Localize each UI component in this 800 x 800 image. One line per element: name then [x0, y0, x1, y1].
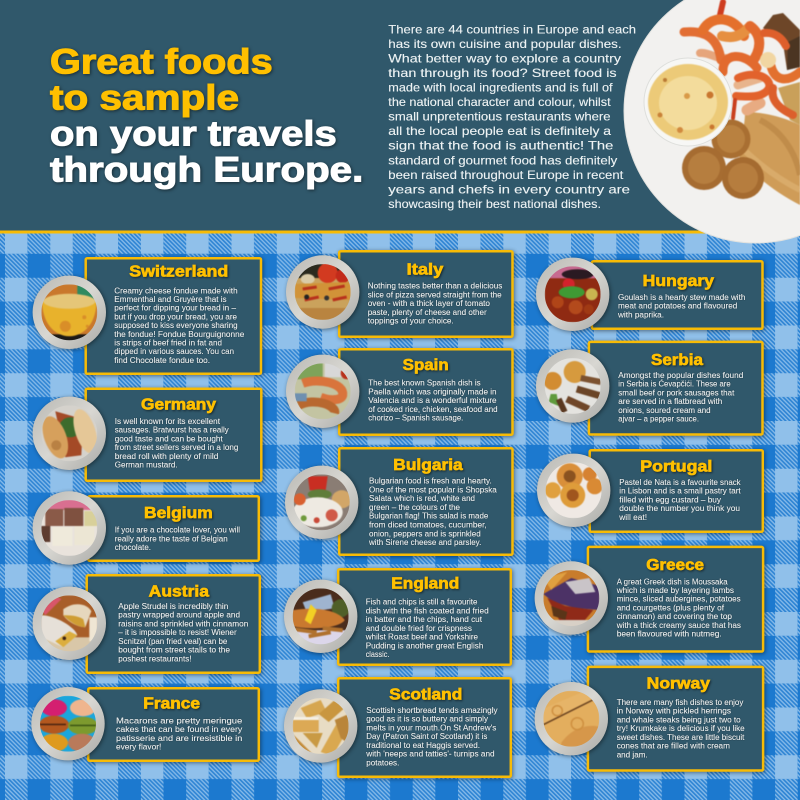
text block: England: classic.: [366, 649, 389, 659]
panel: Serbia: [536, 342, 762, 434]
icon: Belgian chocolates: [33, 491, 106, 565]
text block: Austria: pastry wrapped around apple and: [118, 610, 240, 620]
heading: Belgium: Belgium: [144, 505, 213, 522]
text block: Switzerland: but if you drop your bread, you are: [114, 311, 237, 321]
text block: Serbia: [618, 370, 743, 424]
panel: Greece: [535, 547, 763, 652]
panel: Germany: [33, 389, 261, 481]
heading: Hungary: Hungary: [643, 273, 714, 290]
text block: England: and double fried for crispness: [366, 623, 472, 633]
text block: Serbia: Amongst the popular dishes found: [618, 370, 743, 380]
text block: Bulgaria: with Sirene cheese and parsley.: [368, 537, 481, 547]
text block: Hungary: meat and potatoes and flavoured: [618, 301, 738, 311]
icon: macarons: [31, 687, 105, 760]
text block: Norway: and whale steaks being just two to: [617, 714, 741, 724]
text block: England: dish with the fish coated and fried: [366, 605, 489, 615]
text block: Switzerland: [114, 285, 245, 365]
text block: Portugal: filled with egg custard – buy: [619, 494, 722, 504]
icon: krumkake: [535, 682, 608, 755]
text block: Italy: paste, plenty of cheese and other: [368, 307, 487, 317]
title: through Europe.: [50, 150, 363, 190]
intro paragraph: sign that the food is authentic! The: [388, 139, 614, 153]
text block: Italy: slice of pizza served straight from the: [368, 289, 502, 299]
text block: Serbia: onions, soured cream and: [618, 405, 711, 415]
intro paragraph: standard of gourmet food has definitely: [388, 153, 617, 167]
panel: Italy: [286, 251, 512, 337]
text block: Portugal: [618, 477, 741, 522]
text block: Italy: oven - with a thick layer of tomato: [368, 298, 490, 308]
text block: Greece: A great Greek dish is Moussaka: [617, 576, 728, 586]
intro paragraph: has its own cuisine and popular dishes.: [388, 37, 622, 51]
text block: Norway: in Norway with pickled herrings: [617, 706, 731, 716]
text block: Greece: cinnamon) and covering the top: [617, 611, 732, 621]
panel: France: [31, 687, 259, 761]
icon: plate of seafood: [624, 0, 800, 243]
intro paragraph: made with local ingredients and is full of: [388, 80, 613, 94]
text block: Austria: Scnitzel (pan fried veal) can be: [118, 636, 227, 646]
text block: Italy: toppings of your choice.: [368, 316, 454, 326]
text block: Spain: Valencia and is a wonderful mixture: [368, 395, 497, 405]
text block: Greece: mince, sliced aubergines, potatoes: [617, 594, 741, 604]
header band: [0, 0, 800, 234]
heading: Bulgaria: Bulgaria: [393, 457, 463, 474]
title: Great foods: [50, 41, 273, 81]
text block: Switzerland: perfect for dipping your bread in –: [114, 303, 236, 313]
text block: Scotland: good as it is so buttery and simply: [366, 714, 489, 724]
text block: Greece: [616, 576, 741, 639]
heading: Austria: Austria: [149, 584, 209, 601]
icon: cevapcici: [536, 349, 609, 423]
text block: Germany: German mustard.: [115, 460, 178, 470]
text block: England: Fish and chips is still a favourite: [366, 597, 478, 607]
text block: Austria: – it is impossible to resist! Wiener: [118, 627, 237, 637]
intro paragraph: showcasing their best national dishes.: [388, 197, 601, 211]
heading: Germany: Germany: [141, 396, 216, 414]
text block: Switzerland: Emmenthal and Gruyère that is: [114, 294, 227, 304]
text block: France: every flavor!: [116, 742, 161, 752]
text block: Greece: which is made by layering lambs: [616, 585, 734, 595]
intro paragraph: [388, 22, 636, 211]
text block: Switzerland: supposed to kiss everyone sharing: [114, 320, 238, 330]
heading: Scotland: Scotland: [389, 686, 462, 703]
text block: Germany: bread roll with plenty of mild: [115, 451, 219, 461]
text block: Switzerland: find Chocolate fondue too.: [114, 355, 210, 365]
text block: Bulgaria: [368, 476, 497, 547]
panel: Austria: [33, 575, 260, 673]
panel: Portugal: [537, 450, 763, 532]
text block: Norway: cones that are filled with cream: [617, 741, 730, 751]
text block: Scotland: Scottish shortbread tends amazingly: [366, 705, 498, 715]
heading: France: France: [143, 695, 200, 712]
intro paragraph: There are 44 countries in Europe and each: [388, 22, 636, 36]
text block: Hungary: [617, 292, 746, 319]
text block: Serbia: ajvar – a pepper sauce.: [618, 414, 699, 424]
text block: Bulgaria: onion, peppers and is sprinkled: [369, 528, 481, 538]
text block: England: in batter and the chips, hand cut: [366, 614, 483, 624]
text block: Scotland: melts in your mouth.On St Andrew's: [366, 722, 496, 732]
text block: Norway: try! Krumkake is delicious if you like: [617, 723, 745, 733]
text block: Austria: bought from street stalls to the: [118, 645, 230, 655]
text block: Switzerland: dipped in various sauces. You can: [114, 346, 234, 356]
panel: Hungary: [536, 258, 762, 331]
icon: pizza: [286, 255, 359, 329]
text block: Bulgaria: One of the most popular is Shopska: [369, 484, 497, 494]
text block: Greece: with a thick creamy sauce that has: [616, 620, 741, 630]
text block: Italy: Nothing tastes better than a delicious: [368, 281, 502, 291]
text block: Germany: Is well known for its excellent: [115, 416, 221, 426]
panel: Norway: [535, 667, 763, 770]
text block: Belgium: chocolate.: [115, 542, 151, 552]
text block: Norway: There are many fish dishes to enjoy: [617, 697, 744, 707]
icon: goulash: [536, 258, 609, 331]
text block: Serbia: small beef or pork sausages that: [618, 387, 735, 397]
text block: France: Macarons are pretty meringue: [116, 715, 243, 725]
text block: Serbia: are served in a flatbread with: [618, 396, 722, 406]
intro paragraph: been raised throughout Europe in recent: [388, 168, 624, 182]
icon: fish and chips: [284, 580, 357, 653]
heading: Switzerland: Switzerland: [129, 264, 228, 281]
icon: paella: [286, 355, 359, 428]
panel: Bulgaria: [285, 448, 512, 555]
text block: Serbia: in Serbia is Ćevapčići. These are: [618, 379, 731, 389]
text block: France: patisserie and are irresistible in: [116, 733, 243, 743]
panel: Belgium: [33, 491, 259, 565]
text block: England: whilst Roast beef and Yorkshire: [365, 632, 478, 642]
text block: Norway: [617, 697, 745, 759]
text block: Belgium: really adore the taste of Belgian: [115, 533, 228, 543]
text block: Portugal: double the number you think you: [619, 503, 740, 513]
text block: Bulgaria: Salata which is red, white and: [369, 493, 475, 503]
text block: Norway: sweet dishes. These are little biscuit: [617, 732, 745, 742]
heading: Greece: Greece: [646, 557, 704, 574]
icon: shortbread: [284, 689, 357, 763]
icon: bratwurst roll: [33, 397, 106, 470]
intro paragraph: the national character and colour, whilst: [388, 95, 611, 109]
text block: Belgium: [115, 525, 240, 552]
panel: England: [284, 569, 511, 665]
text block: Scotland: traditional to eat Haggis served.: [366, 740, 480, 750]
intro paragraph: all the local people eat is definitely a: [388, 124, 611, 138]
text block: Spain: Paella which was originally made in: [368, 386, 497, 396]
intro paragraph: small unpretentious restaurants where: [388, 110, 611, 124]
heading: Portugal: Portugal: [640, 459, 712, 476]
icon: shopska salad: [285, 466, 358, 539]
panel: Switzerland: [33, 258, 261, 374]
text block: Germany: [115, 416, 239, 470]
text block: Hungary: Goulash is a hearty stew made with: [618, 292, 746, 302]
text block: Switzerland: the fondue! Fondue Bourguignonne: [114, 329, 245, 339]
text block: Switzerland: is strips of beef fried in fat and: [114, 338, 222, 348]
icon: apple strudel: [33, 587, 106, 660]
heading: England: England: [391, 575, 459, 592]
text block: Spain: The best known Spanish dish is: [368, 378, 481, 388]
text block: Portugal: will eat!: [618, 512, 647, 522]
text block: Belgium: If you are a chocolate lover, you will: [115, 525, 240, 535]
panel: Scotland: [284, 678, 511, 777]
text block: Bulgaria: Bulgarian flag! This salad is made: [369, 511, 488, 521]
text block: Austria: poshest restaurants!: [118, 653, 192, 663]
title: to sample: [50, 78, 239, 118]
text block: France: cakes that can be found in every: [116, 724, 243, 734]
text block: Portugal: Pastel de Nata is a favourite snack: [619, 477, 741, 487]
text block: Switzerland: Creamy cheese fondue made with: [114, 285, 238, 295]
text block: Bulgaria: Bulgarian food is fresh and hearty.: [369, 476, 492, 486]
text block: Germany: from street sellers served in a long: [115, 442, 239, 452]
text block: Spain: chorizo – Spanish sausage.: [368, 413, 463, 423]
icon: pastel de nata: [537, 454, 610, 527]
text block: Bulgaria: from diced tomatoes, cucumber,: [369, 520, 487, 530]
gingham tablecloth background: [0, 230, 800, 800]
icon: moussaka: [535, 561, 608, 635]
intro paragraph: years and chefs in every country are: [388, 182, 630, 196]
text block: Italy: [368, 281, 502, 326]
text block: Bulgaria: green – the colours of the: [369, 502, 460, 512]
heading: Spain: Spain: [403, 357, 449, 374]
text block: Greece: and courgettes (plus plenty of: [617, 602, 725, 612]
text block: France: [116, 715, 243, 752]
panel: Spain: [286, 349, 512, 435]
text block: Scotland: Day (Patron Saint of Scotland) it is: [366, 731, 487, 741]
text block: Spain: [368, 378, 498, 423]
text block: Scotland: potatoes.: [366, 757, 399, 767]
text block: Greece: been flavoured with nutmeg.: [617, 629, 722, 639]
heading: Norway: Norway: [647, 675, 710, 692]
text block: Germany: good taste and can be bought: [115, 434, 223, 444]
text block: Scotland: [365, 705, 498, 767]
text block: Spain: of cooked rice, chicken, seafood and: [368, 404, 498, 414]
text block: England: [365, 597, 489, 659]
title: on your travels: [50, 114, 337, 154]
text block: Portugal: in Lisbon and is a small pastry tart: [619, 486, 741, 496]
text block: Scotland: with 'neeps and tatties'- turnips and: [365, 749, 495, 759]
text block: Hungary: with paprika.: [617, 309, 664, 319]
icon: cheese fondue: [33, 276, 106, 349]
intro paragraph: What better way to explore a country: [388, 51, 621, 65]
title: [50, 41, 363, 190]
text block: England: Pudding is another great English: [366, 640, 484, 650]
text block: Austria: Apple Strudel is incredibly thin: [118, 601, 229, 611]
text block: Austria: [118, 601, 248, 663]
text block: Austria: raisins and sprinkled with cinnamon: [118, 618, 248, 628]
text block: Norway: and jam.: [617, 749, 648, 759]
heading: Serbia: Serbia: [651, 352, 703, 369]
intro paragraph: than through its food? Street food is: [388, 66, 617, 80]
heading: Italy: Italy: [407, 262, 444, 279]
text block: Germany: sausages. Bratwurst has a really: [115, 425, 229, 435]
